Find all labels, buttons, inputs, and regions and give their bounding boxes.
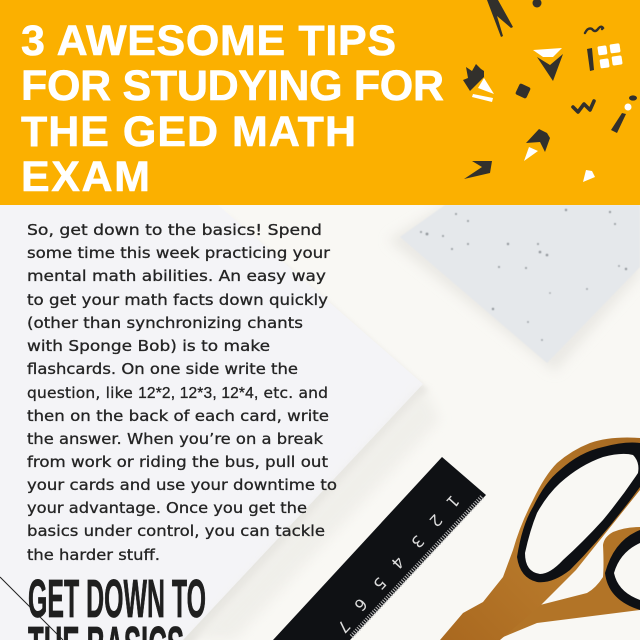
body paragraph: your cards and use your downtime to [27,476,337,494]
body paragraph: mental math abilities. An easy way [27,267,326,285]
body paragraph: the answer. When you’re on a break [27,430,323,448]
main handle [440,438,640,640]
photo: concrete block [388,205,640,372]
title: EXAM [21,153,150,201]
second handle [496,527,640,640]
ruler numbers: 5 [369,573,390,594]
title [21,17,444,201]
desk background [0,205,640,640]
body paragraph: flashcards. On one side write the [27,360,298,378]
body paragraph: then on the back of each card, write [27,407,329,425]
ruler numbers: 6 [350,594,371,615]
body paragraph: some time this week practicing your [27,244,331,262]
body paragraph: the harder stuff. [27,546,160,564]
ruler numbers: 2 [425,510,446,531]
title: 3 AWESOME TIPS [21,17,396,65]
photo: white paper sheet [0,205,440,640]
title: FOR STUDYING FOR [21,62,444,110]
ruler numbers: 4 [387,552,408,573]
body paragraph: question, like 12*2, 12*3, 12*4, etc. and [27,384,328,402]
body paragraph: your advantage. Once you get the [27,499,307,517]
body paragraph: So, get down to the basics! Spend [27,221,322,239]
body paragraph: basics under control, you can tackle [27,522,325,540]
photo: black ruler [273,457,486,640]
header band [0,0,640,205]
photo: gold scissors [440,438,640,640]
infographic canvas: GET DOWN TO [28,569,206,629]
body paragraph: from work or riding the bus, pull out [27,453,328,471]
ruler numbers: 7 [333,616,354,637]
body paragraph [27,221,337,564]
ruler numbers: 3 [407,531,428,552]
title: THE GED MATH [21,108,356,156]
body paragraph: to get your math facts down quickly [27,291,328,309]
body paragraph: (other than synchronizing chants [27,314,303,332]
body paragraph: with Sponge Bob) is to make [27,337,270,355]
section heading [28,569,206,640]
ruler numbers [333,491,463,637]
decorative confetti icons [463,0,637,182]
ruler numbers: 1 [442,491,463,512]
